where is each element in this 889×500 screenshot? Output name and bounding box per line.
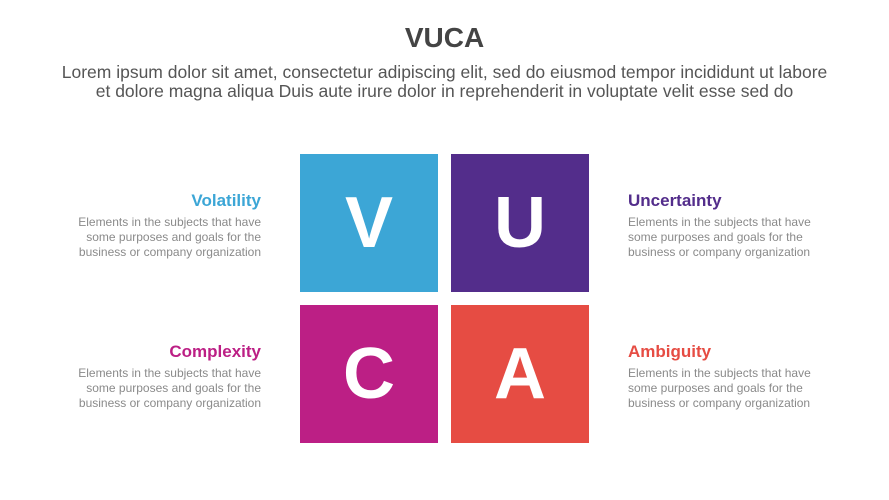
text: Ambiguity bbox=[628, 342, 811, 410]
text: Complexity bbox=[78, 342, 261, 410]
square A: A bbox=[494, 334, 546, 414]
text: Volatility: some purposes and goals for the bbox=[86, 230, 261, 244]
text: Complexity: Complexity bbox=[169, 342, 261, 361]
text: Uncertainty bbox=[628, 191, 811, 259]
square V: V bbox=[345, 183, 393, 263]
square U bbox=[451, 154, 589, 292]
square A bbox=[451, 305, 589, 443]
subtitle: et dolore magna aliqua Duis aute irure dolor in reprehenderit in voluptate velit esse sed do bbox=[96, 81, 793, 101]
subtitle bbox=[62, 62, 827, 101]
square C: C bbox=[343, 334, 395, 414]
text: Uncertainty: business or company organization bbox=[628, 245, 810, 259]
text: Complexity: Elements in the subjects that have bbox=[78, 366, 261, 380]
text: Uncertainty: Uncertainty bbox=[628, 191, 722, 210]
text: Ambiguity: Elements in the subjects that have bbox=[628, 366, 811, 380]
square U: U bbox=[494, 183, 546, 263]
text: Ambiguity: business or company organization bbox=[628, 396, 810, 410]
text: Volatility: Volatility bbox=[191, 191, 261, 210]
text: Ambiguity: some purposes and goals for the bbox=[628, 381, 803, 395]
text: Uncertainty: Elements in the subjects that have bbox=[628, 215, 811, 229]
text: Ambiguity: Ambiguity bbox=[628, 342, 711, 361]
text: Volatility: Elements in the subjects that have bbox=[78, 215, 261, 229]
square C bbox=[300, 305, 438, 443]
title: VUCA bbox=[405, 22, 484, 53]
text: Uncertainty: some purposes and goals for the bbox=[628, 230, 803, 244]
text: Complexity: some purposes and goals for the bbox=[86, 381, 261, 395]
text: Complexity: business or company organization bbox=[79, 396, 261, 410]
subtitle: Lorem ipsum dolor sit amet, consectetur adipiscing elit, sed do eiusmod tempor incididunt ut labore bbox=[62, 62, 827, 82]
text: Volatility bbox=[78, 191, 261, 259]
text: Volatility: business or company organization bbox=[79, 245, 261, 259]
square V bbox=[300, 154, 438, 292]
